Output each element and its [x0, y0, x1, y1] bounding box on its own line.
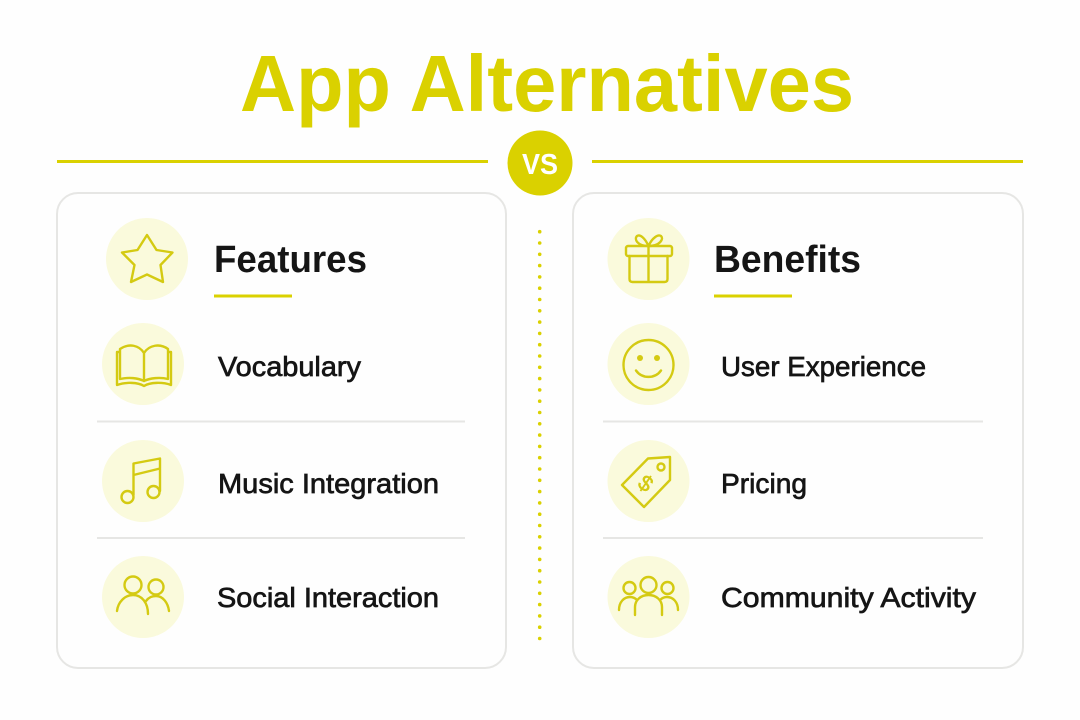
dotted center divider	[538, 232, 542, 639]
icon: star	[106, 218, 188, 300]
heading: features: Features	[214, 239, 367, 281]
vs badge: VS	[522, 149, 558, 181]
title: App Alternatives	[240, 39, 854, 128]
heading underline	[214, 294, 292, 298]
icon: price tag	[608, 440, 690, 522]
panel: features	[57, 193, 506, 668]
label: music integration: Music Integration	[218, 468, 439, 499]
icon: music note	[102, 440, 184, 522]
icon: two people	[102, 556, 184, 638]
label: social interaction: Social Interaction	[217, 582, 439, 613]
heading underline	[714, 294, 792, 298]
right header line	[592, 160, 1023, 163]
icon: gift	[608, 218, 690, 300]
icon: open book	[102, 323, 184, 405]
vs badge	[508, 130, 572, 196]
heading: benefits: Benefits	[714, 239, 861, 281]
label: community activity: Community Activity	[721, 582, 976, 613]
icon: community	[608, 556, 690, 638]
label: vocabulary: Vocabulary	[218, 351, 361, 382]
left header line	[57, 160, 488, 163]
label: user experience: User Experience	[721, 351, 926, 382]
panel: benefits	[573, 193, 1023, 668]
icon: price tag: $	[634, 470, 658, 497]
icon: smiley	[608, 323, 690, 405]
label: pricing: Pricing	[721, 468, 807, 499]
